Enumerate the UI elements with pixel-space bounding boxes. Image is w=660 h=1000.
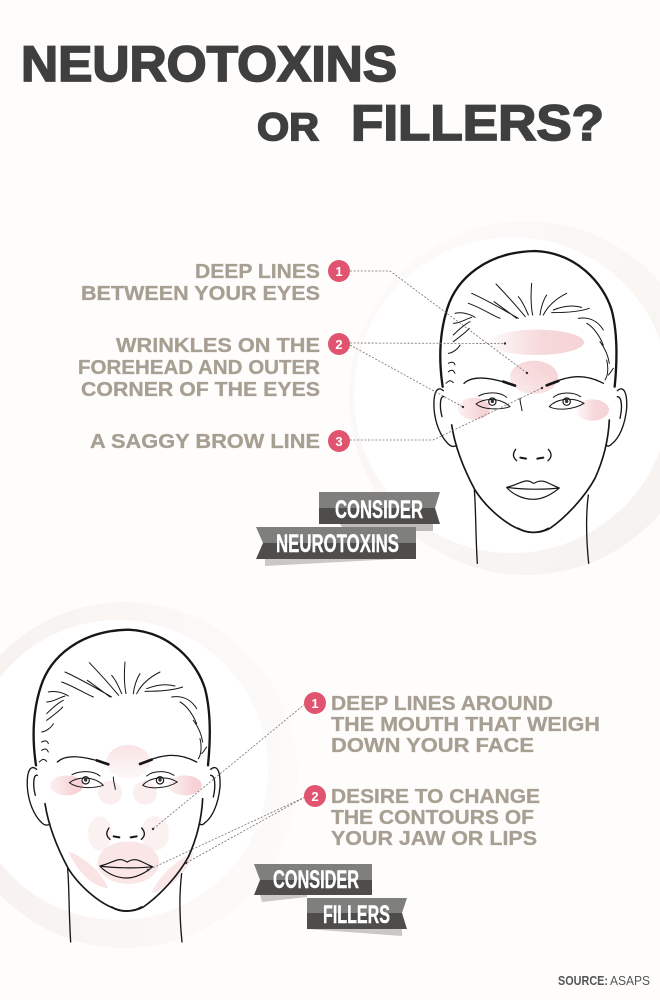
- title line: neurotoxins: NEUROTOXINS: [21, 36, 397, 92]
- badge 1: 1: [335, 264, 343, 279]
- background circle: neurotoxins: [349, 221, 660, 575]
- panel: fillers: [0, 602, 600, 948]
- ribbon: consider fillers: [254, 864, 407, 936]
- badge 2: 2: [335, 337, 343, 352]
- label 2: forehead wrinkles: [78, 335, 321, 401]
- label 2: contours of jaw or lips: THE CONTOURS OF: [331, 807, 534, 829]
- badge 1: [304, 692, 326, 714]
- badge 2: 2: [311, 789, 319, 804]
- label 1: deep lines around mouth: DOWN YOUR FACE: [331, 735, 534, 757]
- title word: fillers: FILLERS?: [351, 95, 604, 151]
- badge 3: [328, 430, 350, 452]
- label 1: deep lines around mouth: [331, 693, 600, 757]
- badge 2: [328, 333, 350, 355]
- label 2: contours of jaw or lips: [331, 786, 540, 850]
- badge 3: 3: [335, 434, 343, 449]
- source credit: SOURCE:: [558, 973, 608, 988]
- ribbon: consider neurotoxins: CONSIDER: [335, 496, 423, 524]
- source credit: ASAPS: [610, 973, 650, 988]
- leader lines: fillers: [147, 704, 305, 871]
- label 3: saggy brow: A SAGGY BROW LINE: [90, 431, 320, 453]
- label 1: deep lines between eyes: BETWEEN YOUR EYES: [81, 283, 320, 305]
- ribbon: consider neurotoxins: [256, 492, 440, 566]
- label 1: deep lines around mouth: THE MOUTH THAT WEIGH: [331, 714, 600, 736]
- ribbon: consider fillers: CONSIDER: [273, 866, 359, 894]
- panel: neurotoxins: [78, 221, 660, 575]
- label 1: deep lines between eyes: [81, 261, 320, 305]
- badge 2: [304, 785, 326, 807]
- face illustration: fillers: [27, 630, 220, 942]
- label 2: forehead wrinkles: FOREHEAD AND OUTER: [78, 357, 321, 379]
- background circle: fillers: [0, 602, 298, 948]
- ribbon: consider neurotoxins: NEUROTOXINS: [276, 530, 399, 558]
- leader lines: neurotoxins: [350, 271, 543, 440]
- highlighted areas: fillers: [50, 745, 202, 893]
- highlighted areas: neurotoxins: [458, 330, 609, 421]
- label 1: deep lines between eyes: DEEP LINES: [195, 261, 320, 283]
- label 2: forehead wrinkles: CORNER OF THE EYES: [81, 379, 320, 401]
- label 2: contours of jaw or lips: YOUR JAW OR LIPS: [331, 828, 537, 850]
- face illustration: neurotoxins: [434, 251, 627, 563]
- title word: or: OR: [257, 106, 319, 149]
- ribbon: consider fillers: FILLERS: [323, 901, 390, 929]
- label 2: contours of jaw or lips: DESIRE TO CHANGE: [331, 786, 540, 808]
- title: [21, 36, 604, 151]
- label 1: deep lines around mouth: DEEP LINES AROUND: [331, 693, 553, 715]
- badge 1: 1: [311, 696, 319, 711]
- badge 1: [328, 260, 350, 282]
- label 2: forehead wrinkles: WRINKLES ON THE: [116, 335, 320, 357]
